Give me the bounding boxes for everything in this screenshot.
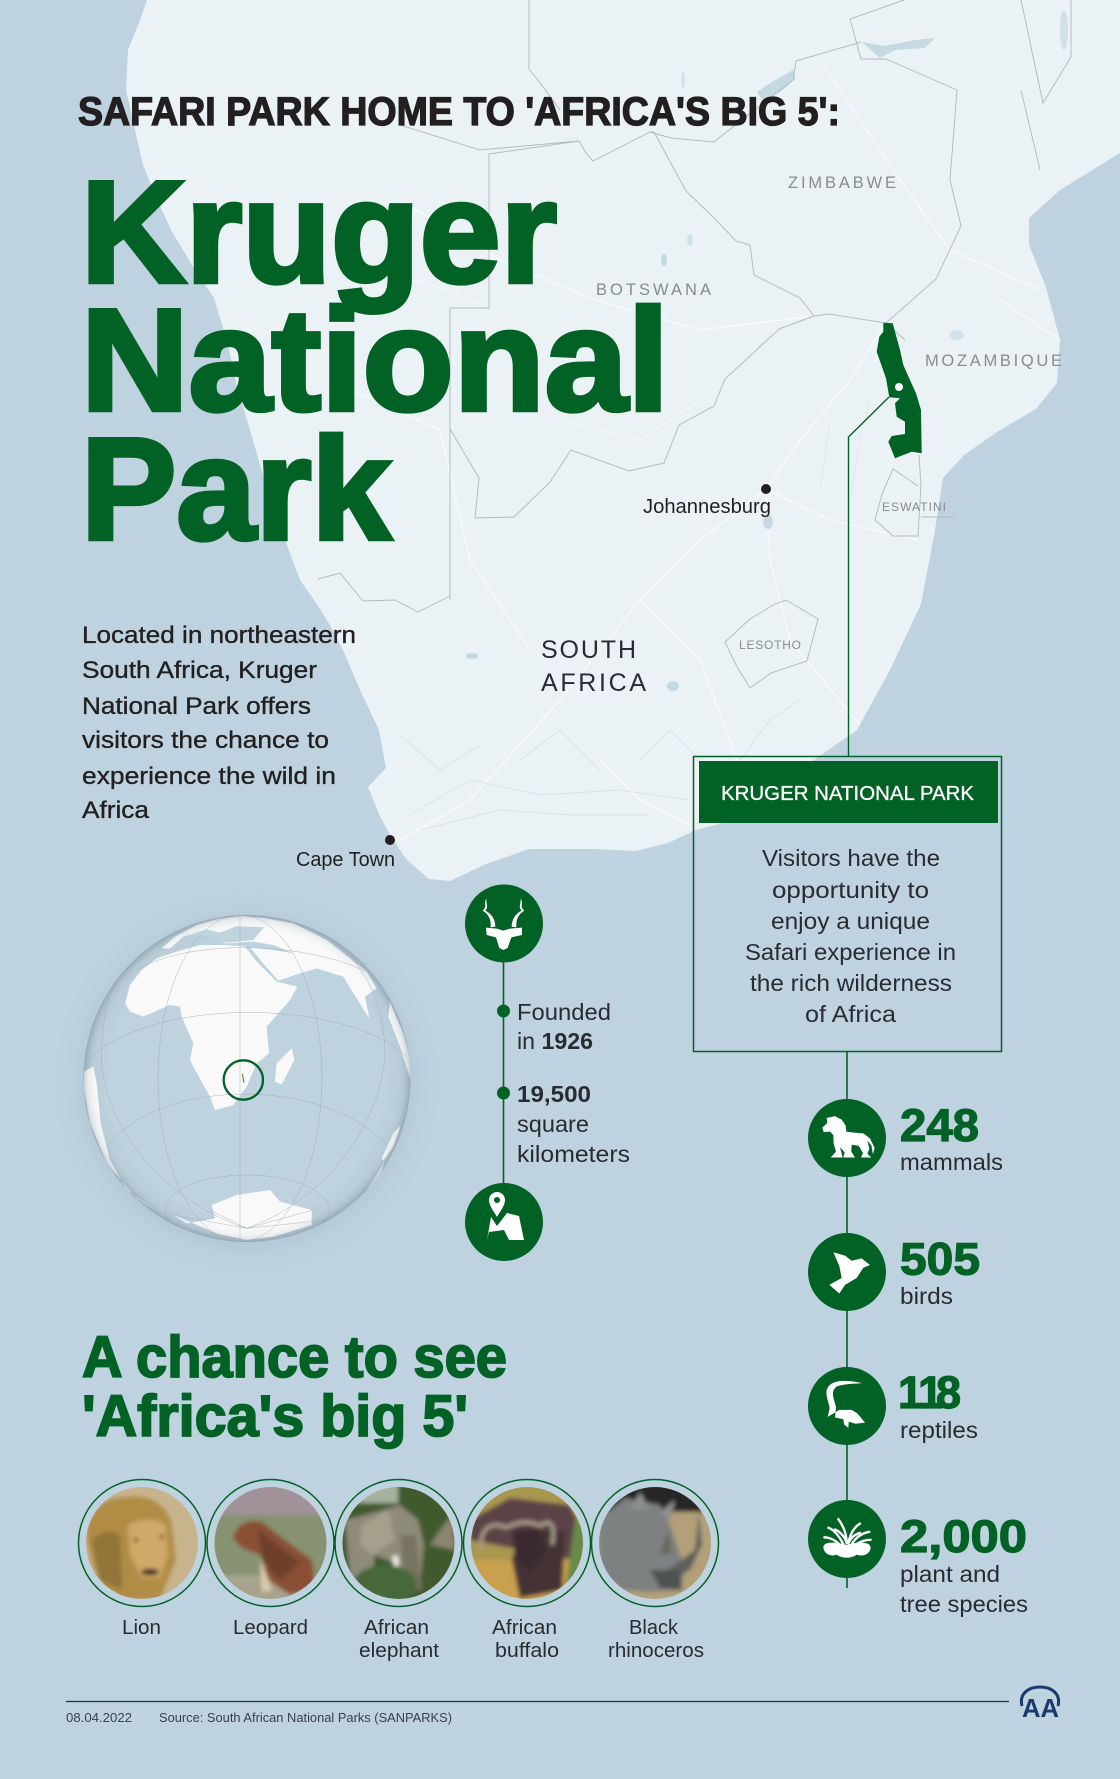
- city: Cape Town: Cape Town: [296, 849, 395, 871]
- city: Johannesburg: Johannesburg: [643, 496, 771, 518]
- intro paragraph: [82, 622, 356, 824]
- label: South Africa: SOUTH: [541, 636, 636, 664]
- footer: 08.04.2022: [66, 1710, 132, 1725]
- heading: A chance to see Africa's big 5: [82, 1325, 507, 1449]
- intro paragraph: visitors the chance to: [82, 727, 329, 754]
- city: Cape Town: [296, 835, 395, 871]
- stat: 248 mammals: [808, 1099, 1003, 1177]
- title: Kruger National Park: National: [81, 279, 669, 441]
- intro paragraph: Africa: [82, 797, 150, 824]
- stat: 2,000 plant and tree species: tree species: [900, 1591, 1028, 1617]
- animal labels: buffalo: [495, 1640, 559, 1662]
- animal labels: elephant: [359, 1640, 439, 1662]
- icon: map pin: [465, 1183, 543, 1261]
- bullet: 19,500 square kilometers: [497, 1081, 630, 1167]
- icon: bird: [829, 1252, 870, 1294]
- stat: 118 reptiles: [808, 1367, 978, 1445]
- animal labels: African: [492, 1617, 557, 1639]
- intro paragraph: National Park offers: [82, 693, 311, 720]
- animal: African buffalo: [464, 1480, 591, 1606]
- map country labels: MOZAMBIQUE: [925, 352, 1062, 370]
- callout body text: the rich wilderness: [750, 970, 952, 996]
- heading: Safari park home to Africa's big 5: SAFARI PARK HOME TO 'AFRICA'S BIG 5':: [78, 90, 840, 134]
- callout body text: enjoy a unique: [771, 908, 930, 934]
- animal labels: [122, 1617, 704, 1662]
- map country labels: BOTSWANA: [596, 281, 711, 299]
- callout body text: Visitors have the: [762, 845, 940, 871]
- map country labels: [596, 174, 1062, 652]
- label: South Africa: AFRICA: [541, 669, 646, 697]
- icon: lion: [822, 1116, 875, 1157]
- map of southern Africa: [126, 0, 1120, 881]
- label: South Africa: [541, 636, 646, 697]
- bullet: 19,500 square kilometers: kilometers: [517, 1141, 630, 1167]
- title: Kruger National Park: [81, 151, 669, 570]
- title: Kruger National Park: Park: [81, 408, 391, 570]
- stat: 248 mammals: mammals: [900, 1149, 1003, 1175]
- stat: 2,000 plant and tree species: [808, 1500, 1028, 1617]
- footer: [66, 1702, 1009, 1725]
- footer: Source: South African National Parks (SANPARKS): [159, 1710, 452, 1725]
- animal: African elephant: [335, 1480, 463, 1606]
- timeline: founding facts: [465, 884, 630, 1261]
- callout body text: [745, 845, 956, 1027]
- stat: 118 reptiles: reptiles: [900, 1417, 978, 1443]
- intro paragraph: South Africa, Kruger: [82, 657, 317, 684]
- city: Johannesburg: [643, 484, 771, 518]
- stat: 505 birds: birds: [900, 1283, 953, 1309]
- stat: 248 mammals: 248: [900, 1100, 979, 1151]
- animal: leopard: [207, 1480, 335, 1606]
- icon: kudu antelope head: [465, 884, 543, 962]
- callout header: [699, 761, 998, 823]
- bullet: founded in 1926: Founded: [517, 999, 611, 1025]
- animal: lion: [78, 1480, 206, 1606]
- stat: 2,000 plant and tree species: plant and: [900, 1561, 1000, 1587]
- heading: A chance to see Africa's big 5: 'Africa's big 5': [82, 1384, 468, 1449]
- icon: crocodile: [826, 1381, 865, 1428]
- logo: Anadolu Agency: AA: [1022, 1693, 1059, 1723]
- callout body text: opportunity to: [772, 877, 929, 903]
- heading: A chance to see Africa's big 5: A chance to see: [82, 1325, 507, 1390]
- animal: black rhinoceros: [592, 1480, 720, 1606]
- bullet: 19,500 square kilometers: square: [517, 1111, 589, 1137]
- map country labels: ESWATINI: [882, 500, 946, 514]
- intro paragraph: experience the wild in: [82, 763, 336, 790]
- bullet: founded in 1926: in 1926: [517, 1028, 593, 1054]
- title: Kruger National Park: Kruger: [81, 151, 557, 313]
- stat: 2,000 plant and tree species: 2,000: [900, 1511, 1027, 1562]
- stat: 505 birds: [808, 1233, 980, 1311]
- statistics line: [846, 1052, 848, 1588]
- connector line from park to callout: [848, 397, 889, 756]
- globe: [79, 914, 415, 1250]
- bullet: 19,500 square kilometers: 19,500: [517, 1081, 591, 1107]
- callout body text: of Africa: [805, 1001, 896, 1027]
- animal labels: Black: [629, 1617, 679, 1639]
- stat: 505 birds: 505: [900, 1234, 980, 1284]
- callout header: KRUGER NATIONAL PARK: [721, 783, 975, 805]
- animal labels: Leopard: [233, 1617, 308, 1639]
- intro paragraph: Located in northeastern: [82, 622, 356, 649]
- stat: 118 reptiles: 118: [898, 1367, 961, 1418]
- bullet: founded in 1926: [497, 999, 611, 1054]
- animal labels: Lion: [122, 1617, 161, 1639]
- map country labels: ZIMBABWE: [788, 174, 896, 192]
- callout: Kruger National Park: [694, 756, 1002, 1052]
- map country labels: LESOTHO: [739, 638, 801, 652]
- animal labels: African: [364, 1617, 429, 1639]
- Kruger park shape: [877, 323, 922, 458]
- animal labels: rhinoceros: [608, 1640, 704, 1662]
- callout body text: Safari experience in: [745, 939, 956, 965]
- icon: plants: [823, 1519, 871, 1558]
